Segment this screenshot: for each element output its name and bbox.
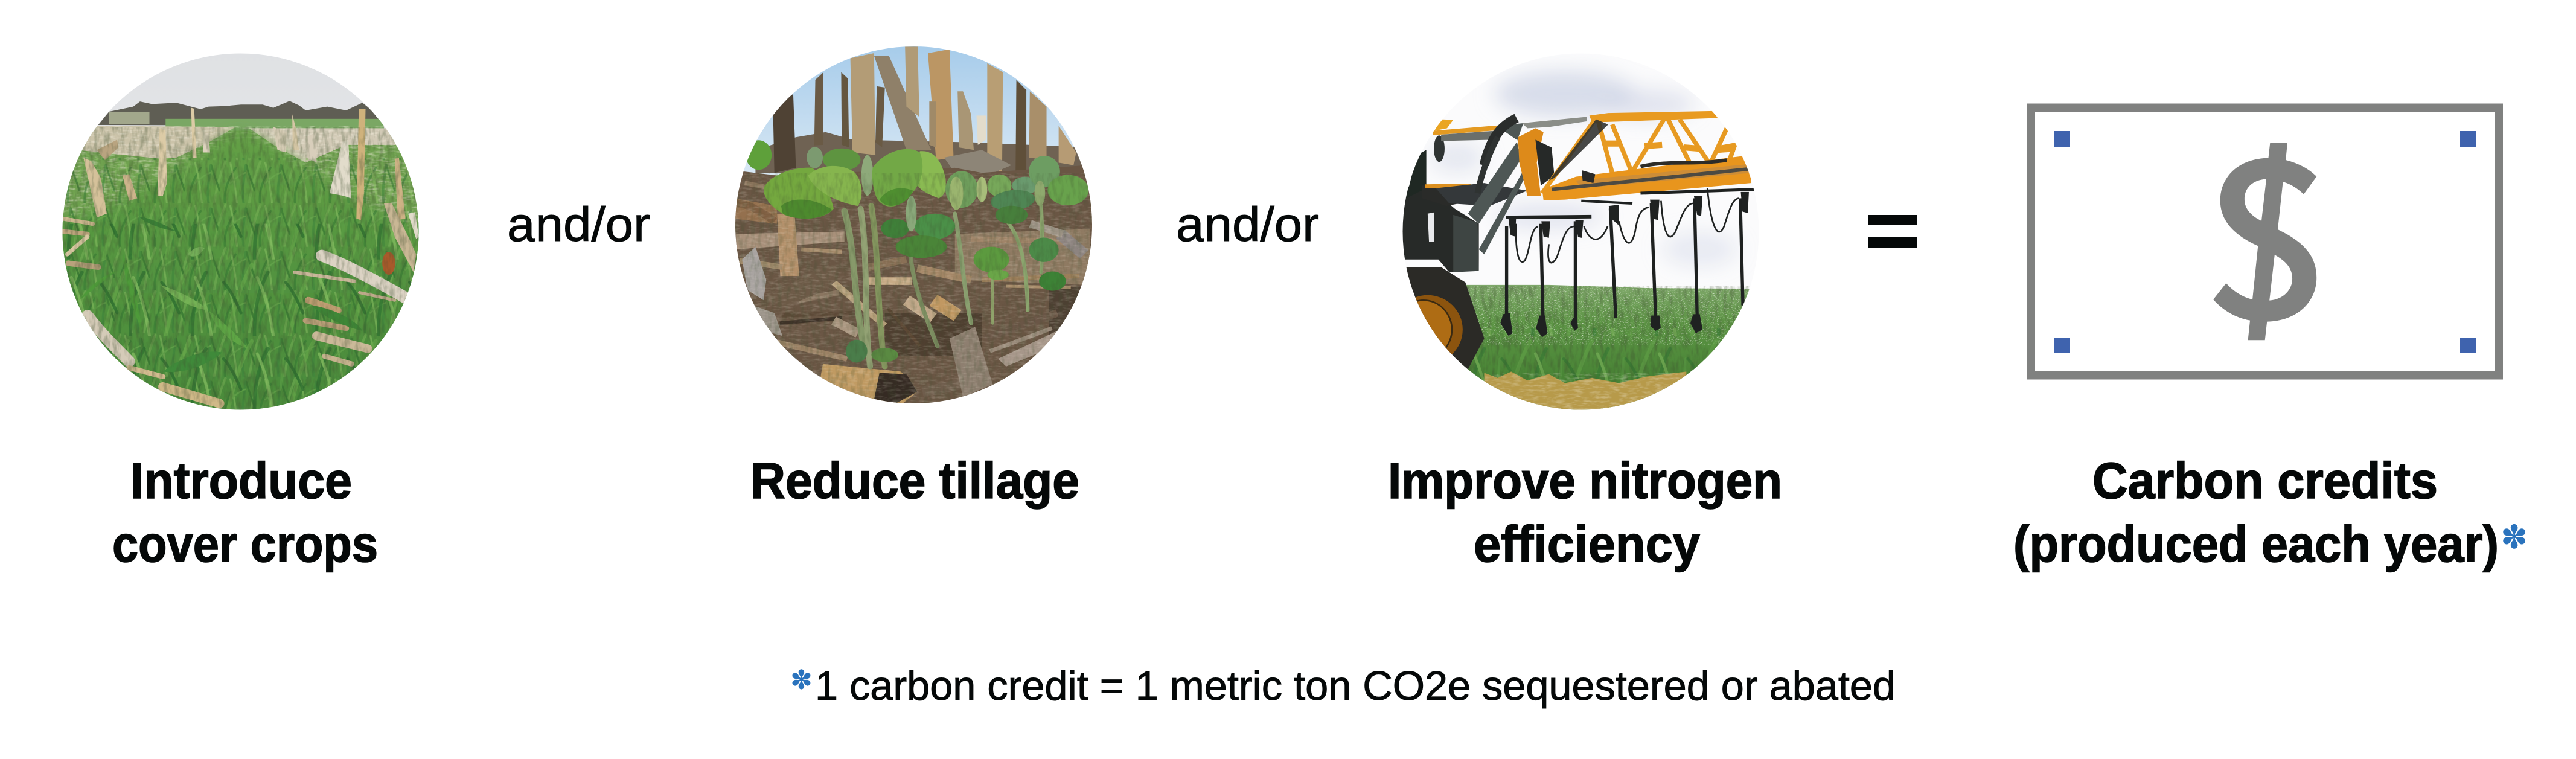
leaves xyxy=(746,140,1088,363)
icon: dollar bill xyxy=(2031,107,2499,376)
stems xyxy=(845,206,1042,367)
dry foreground xyxy=(1485,371,1686,412)
text: Improve nitrogen efficiency: Improve nitrogen xyxy=(1388,452,1782,509)
text: Carbon credits (produced each year)*: ✽ xyxy=(2501,518,2528,556)
scattered residue xyxy=(737,181,1088,362)
text: and/or (first): and/or xyxy=(507,197,650,251)
photo: high-clearance machine applying nitrogen over corn xyxy=(1393,51,1762,412)
stalks xyxy=(83,108,419,272)
equals sign xyxy=(1868,215,1917,248)
text: Carbon credits (produced each year)*: Carbon credits xyxy=(2092,452,2438,509)
litter ground xyxy=(734,165,1095,407)
central grass xyxy=(53,130,427,417)
text: Reduce tillage: Reduce tillage xyxy=(750,452,1079,509)
booms and hydraulic arm xyxy=(1433,125,1500,135)
crop litter along the edges xyxy=(63,219,406,403)
text: Introduce cover crops: cover crops xyxy=(112,516,378,572)
photo: soybean seedlings in untilled corn stubble xyxy=(731,43,1095,407)
stalks xyxy=(773,46,1076,177)
foreground blades xyxy=(79,216,362,372)
footnote: 1 carbon credit = 1 metric ton CO2e sequestered or abated xyxy=(815,663,1896,709)
drop arms and hoses xyxy=(1506,188,1754,321)
tire and tractor body xyxy=(1404,267,1485,374)
clouds xyxy=(1430,71,1737,267)
text: Introduce cover crops xyxy=(112,452,378,572)
tree line xyxy=(98,101,384,126)
text: Improve nitrogen efficiency xyxy=(1388,452,1782,572)
text: and/or (second): and/or xyxy=(1176,197,1319,251)
photo: cover crops growing between corn stalk rows xyxy=(53,51,427,417)
footnote: ✽ xyxy=(790,665,813,696)
text: Improve nitrogen efficiency: efficiency xyxy=(1474,516,1700,572)
text: Introduce cover crops: Introduce xyxy=(130,452,352,509)
text: Carbon credits (produced each year)*: (produced each year) xyxy=(2013,516,2499,572)
text: Carbon credits (produced each year)* xyxy=(2013,452,2528,572)
orange truss xyxy=(1542,115,1735,193)
stubble rows in the distance xyxy=(77,126,235,158)
corn field xyxy=(1457,285,1754,412)
